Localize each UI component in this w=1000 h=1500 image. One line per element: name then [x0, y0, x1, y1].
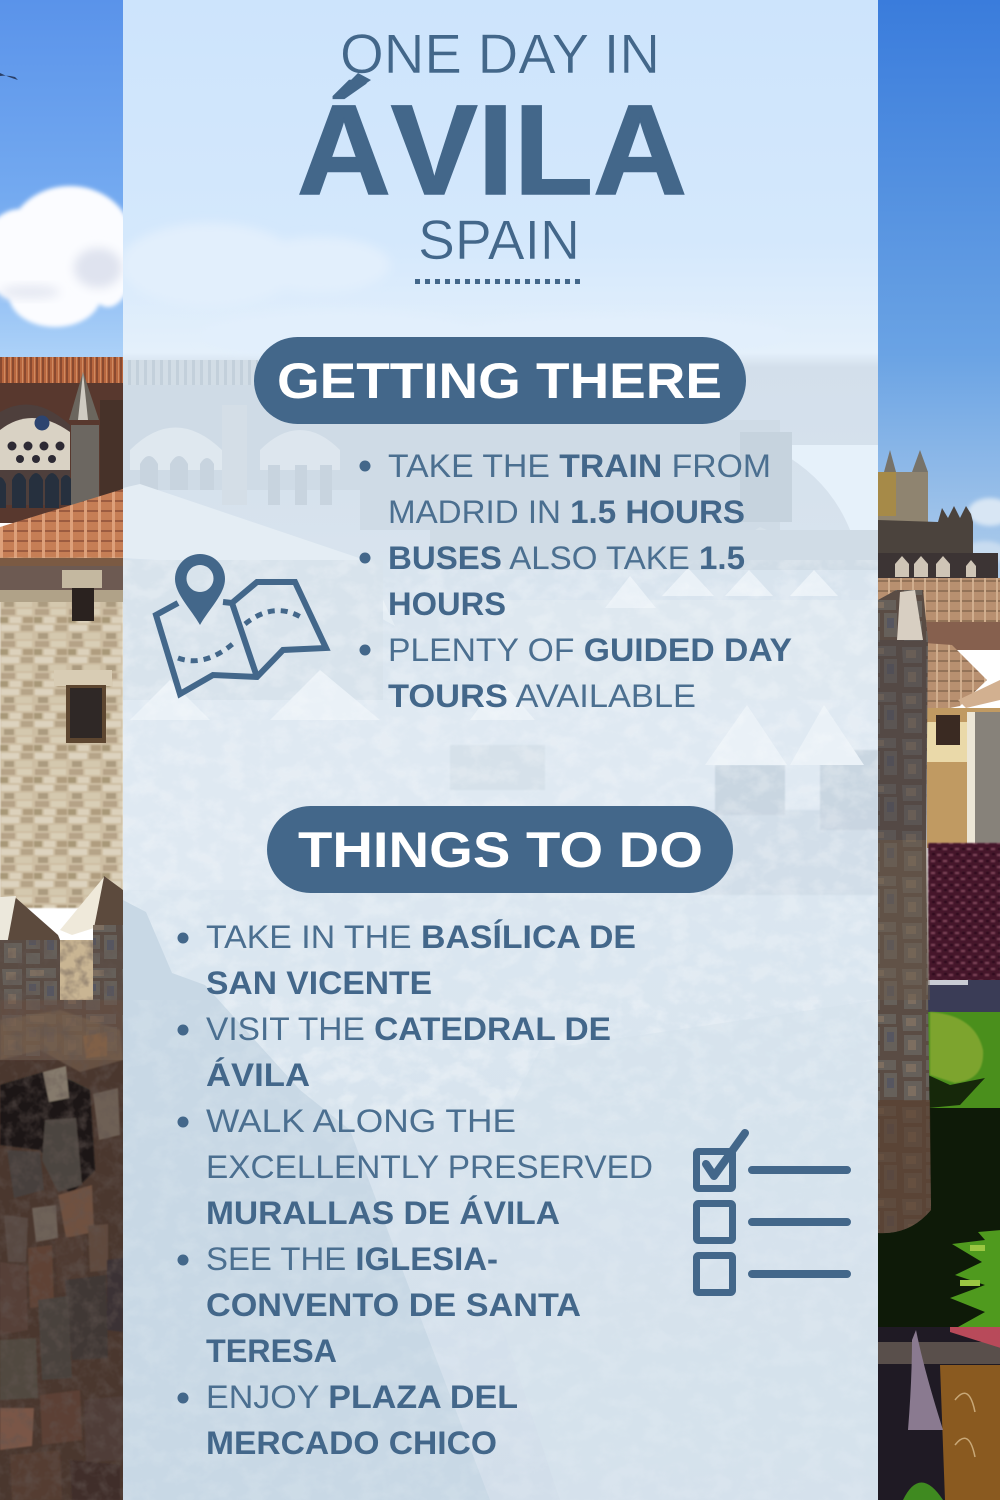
heading pill: things to do: THINGS TO DO	[298, 822, 703, 878]
item: buses: BUSES ALSO TAKE 1.5	[388, 540, 745, 576]
washed stone texture upper	[123, 560, 878, 1000]
item: basilica: SAN VICENTE	[206, 965, 432, 1001]
item: train	[388, 448, 771, 530]
item: tours: PLENTY OF GUIDED DAY	[388, 632, 792, 668]
washed clouds	[124, 224, 385, 282]
washed cathedral	[123, 360, 880, 570]
left photo strip	[0, 0, 132, 1500]
slanted lower roof	[0, 489, 123, 558]
sky	[877, 0, 1000, 590]
item: tours	[388, 632, 792, 714]
item: basilica	[206, 919, 636, 1001]
gothic facade	[0, 372, 123, 523]
item: murallas: WALK ALONG THE	[206, 1103, 516, 1139]
title line: spain: SPAIN	[418, 208, 580, 271]
bullet markers	[178, 932, 188, 1404]
round stone tower	[878, 590, 931, 1233]
seagull	[0, 73, 18, 80]
title line: one day in: ONE DAY IN	[340, 22, 660, 85]
item: iglesia	[206, 1241, 581, 1369]
purple tree	[928, 843, 1000, 983]
item: plaza: ENJOY PLAZA DEL	[206, 1379, 518, 1415]
item: tours: TOURS AVAILABLE	[388, 678, 696, 714]
washed shadow diagonal on lower wall	[123, 900, 490, 1500]
washed lower stones	[460, 1000, 878, 1500]
item: murallas: EXCELLENTLY PRESERVED	[206, 1149, 653, 1185]
item: iglesia: SEE THE IGLESIA-	[206, 1241, 498, 1277]
title block	[297, 22, 687, 282]
item: basilica: TAKE IN THE BASÍLICA DE	[206, 919, 636, 955]
sky and cloud	[0, 0, 132, 360]
list: things to do	[178, 919, 653, 1461]
washed stone texture lower	[123, 1000, 878, 1500]
battlements	[0, 876, 123, 1500]
icon: checklist	[696, 1133, 847, 1292]
translucent panel with washed photo	[120, 0, 880, 1500]
washed roof	[123, 484, 395, 626]
upper roof	[0, 357, 123, 383]
dotted underline	[415, 279, 580, 284]
castle tower	[878, 450, 998, 580]
item: train: MADRID IN 1.5 HOURS	[388, 494, 745, 530]
stone wall with windows	[0, 558, 123, 908]
item: plaza: MERCADO CHICO	[206, 1425, 497, 1461]
title line: avila: ÁVILA	[297, 79, 687, 222]
item: murallas	[206, 1103, 653, 1231]
item: train: TAKE THE TRAIN FROM	[388, 448, 771, 484]
rubble wall stones	[0, 1000, 123, 1500]
item: murallas: MURALLAS DE ÁVILA	[206, 1195, 560, 1231]
item: iglesia: CONVENTO DE SANTA	[206, 1287, 581, 1323]
item: buses	[388, 540, 745, 622]
heading pill: getting there	[254, 337, 746, 424]
path and garden	[877, 980, 1000, 1333]
stone grain	[0, 940, 123, 1500]
item: catedral: ÁVILA	[206, 1057, 310, 1093]
roofs and houses	[878, 578, 1000, 852]
right photo strip	[877, 0, 1000, 1500]
icon: map with location pin	[156, 554, 326, 694]
fountain pool	[878, 1327, 1000, 1500]
heading pill: things to do	[267, 806, 733, 893]
bullet markers	[360, 460, 370, 656]
item: catedral: VISIT THE CATEDRAL DE	[206, 1011, 611, 1047]
heading pill: getting there: GETTING THERE	[277, 353, 722, 409]
item: plaza	[206, 1379, 518, 1461]
item: catedral	[206, 1011, 611, 1093]
item: iglesia: TERESA	[206, 1333, 337, 1369]
washed wall and merlons	[123, 560, 878, 895]
item: buses: HOURS	[388, 586, 506, 622]
list: getting there	[360, 448, 792, 714]
